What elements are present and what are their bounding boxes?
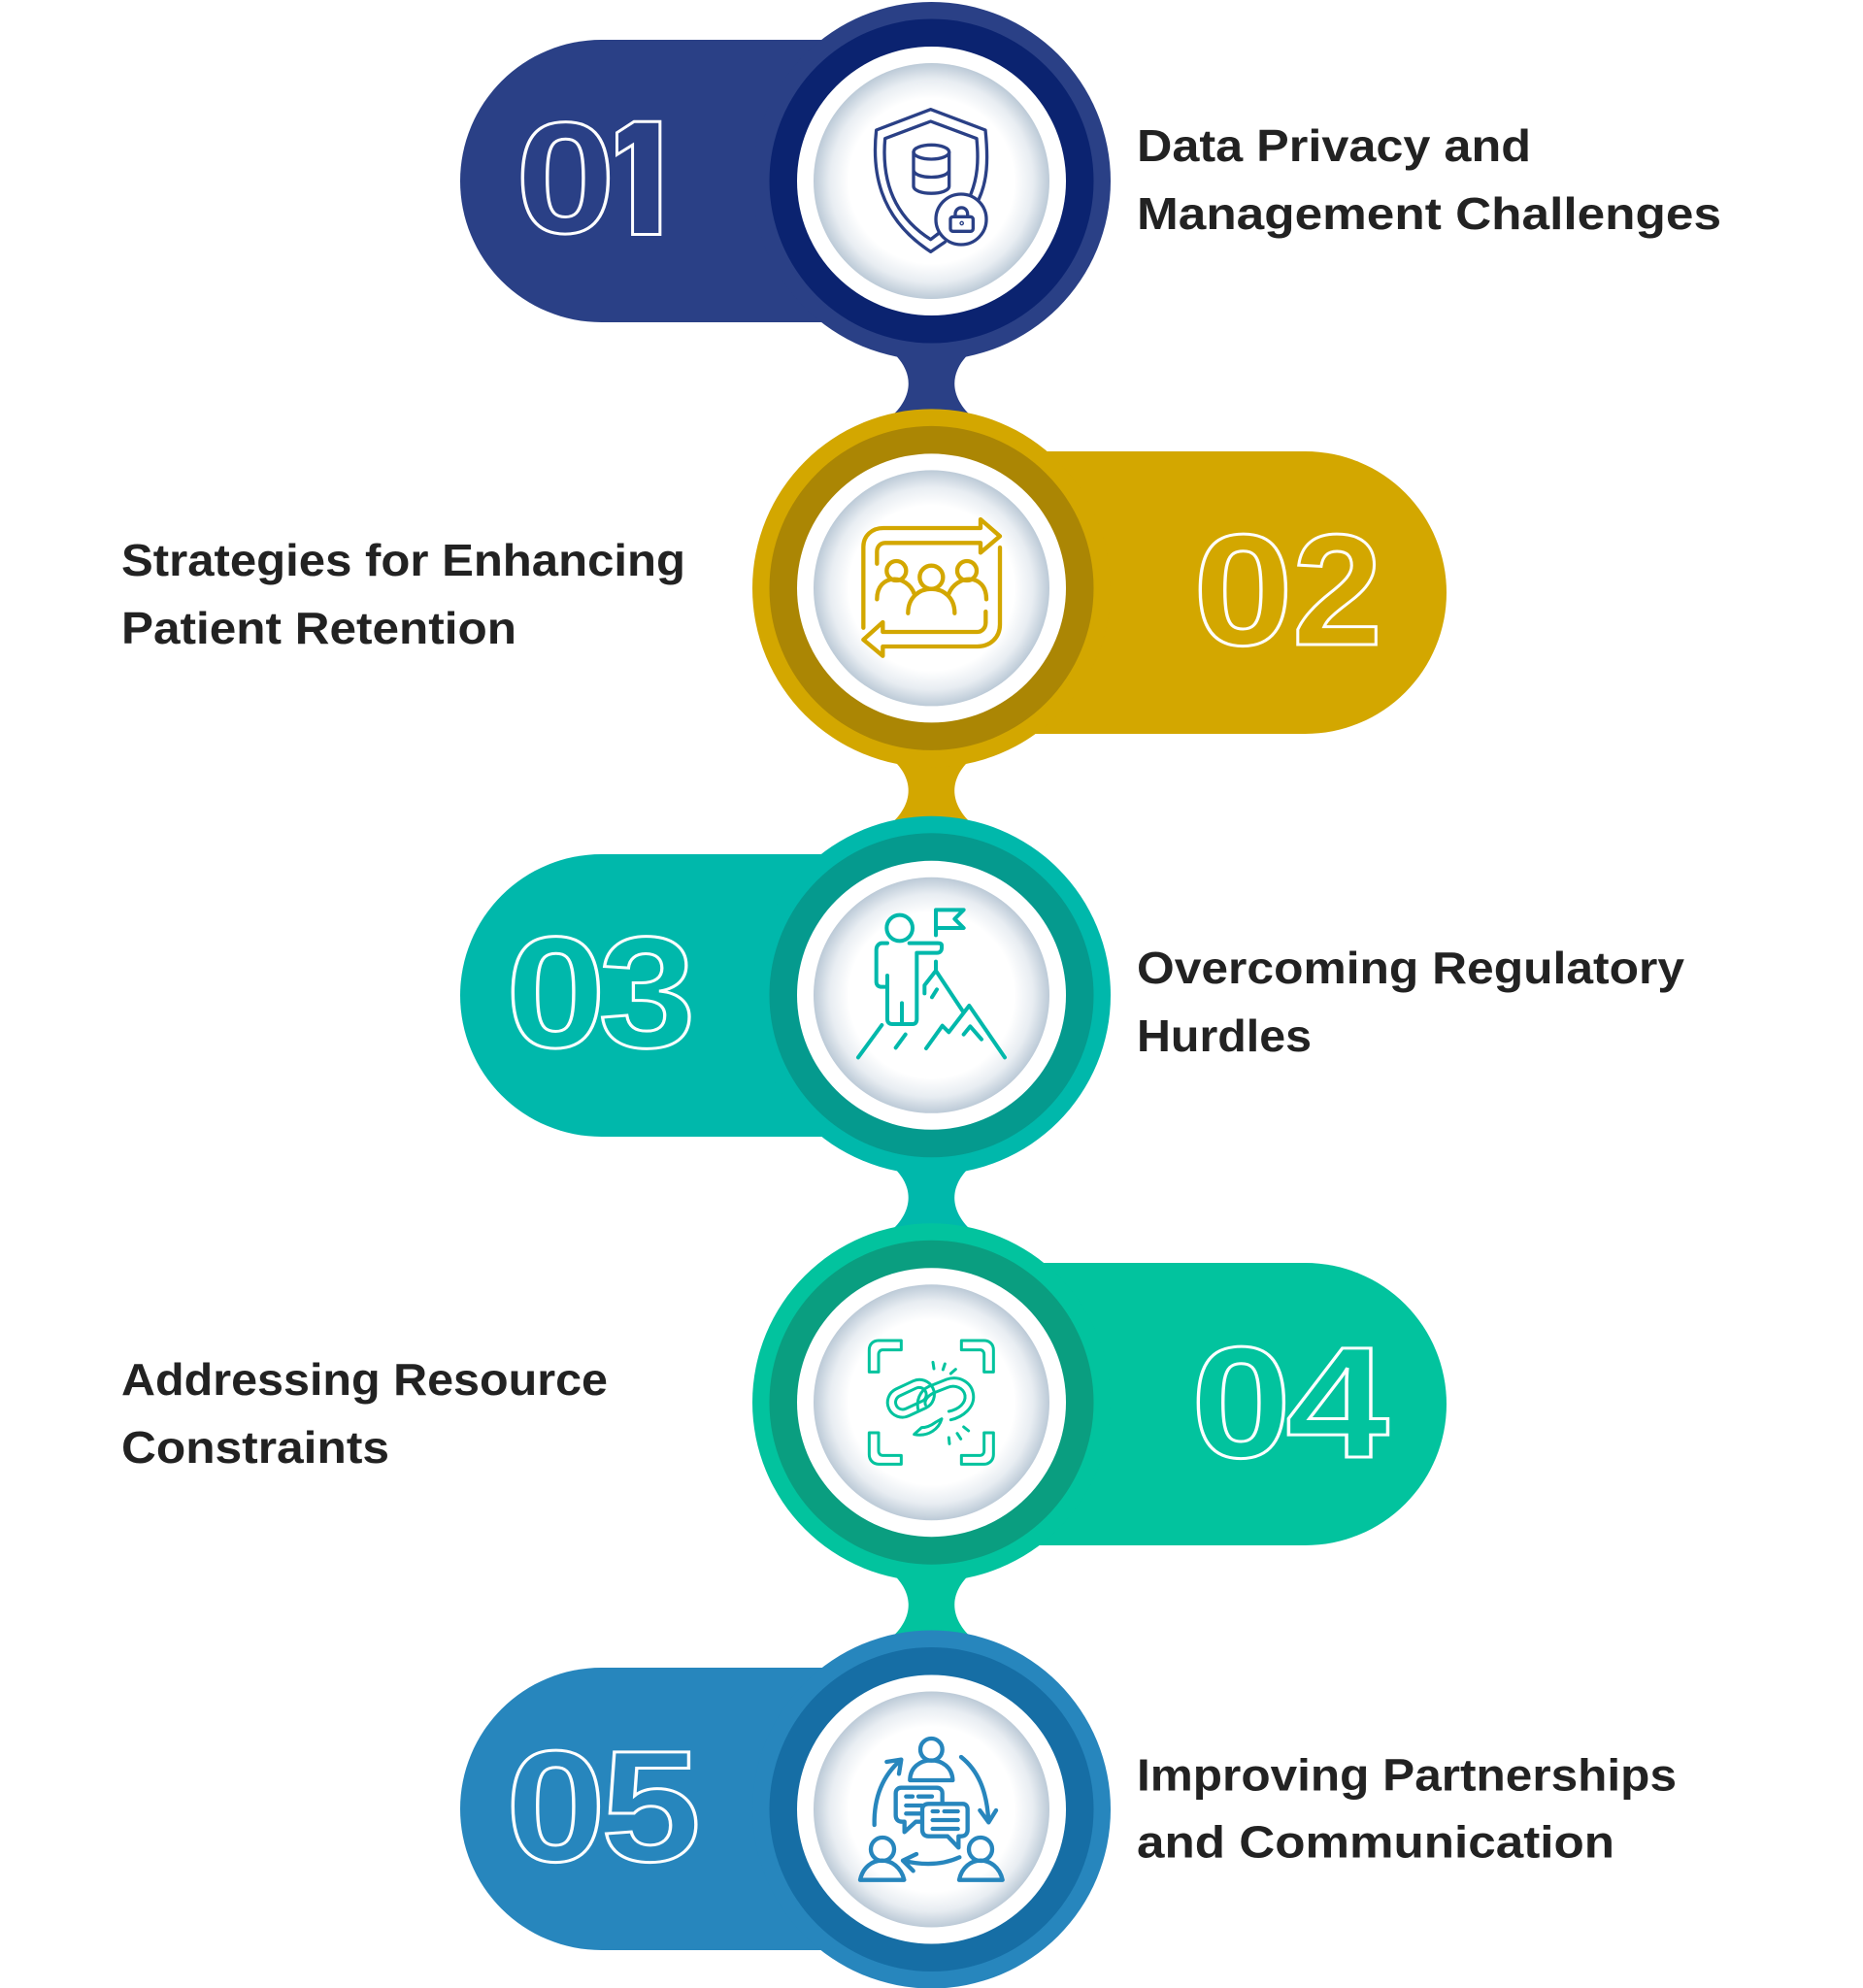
number 05: 0 xyxy=(506,1717,606,1895)
step 3: regulatory hurdles xyxy=(460,816,1684,1233)
pill 05 xyxy=(460,1668,1068,1950)
label 1: Data Privacy and xyxy=(1137,120,1531,171)
number 03: 3 xyxy=(598,903,695,1081)
label 4 xyxy=(121,1354,608,1473)
ring 2 xyxy=(752,409,1111,767)
step 1: data privacy xyxy=(460,2,1721,419)
number 02: 0 xyxy=(1193,501,1293,679)
icon: shield with database and lock xyxy=(875,110,987,251)
label 1 xyxy=(1137,120,1721,239)
ring 3 xyxy=(752,816,1111,1175)
connector 2 xyxy=(889,756,975,826)
ring 5 xyxy=(752,1631,1111,1988)
label 3 xyxy=(1137,943,1684,1061)
label 5: Improving Partnerships xyxy=(1137,1749,1677,1800)
label 3: Overcoming Regulatory xyxy=(1137,943,1684,993)
ring 4 xyxy=(752,1223,1111,1581)
step 2: patient retention xyxy=(121,409,1447,826)
number 03 xyxy=(506,903,695,1081)
number 04 xyxy=(1191,1313,1388,1491)
number 03: 0 xyxy=(506,903,606,1081)
icon: people communicating in a cycle xyxy=(860,1739,1003,1880)
pill 01 xyxy=(460,40,1068,322)
number 02: 2 xyxy=(1292,501,1382,679)
pill 04 xyxy=(796,1263,1447,1545)
label 2: Patient Retention xyxy=(121,603,516,653)
label 5 xyxy=(1137,1749,1677,1868)
number 01 xyxy=(520,120,662,236)
pill 02 xyxy=(796,451,1447,734)
connector 4 xyxy=(889,1571,975,1640)
number 04: 4 xyxy=(1285,1313,1388,1491)
label 3: Hurdles xyxy=(1137,1011,1312,1061)
number 01: 1 xyxy=(586,79,697,302)
number 05 xyxy=(506,1717,701,1895)
step 5: partnerships and communication xyxy=(460,1631,1677,1988)
step 4: resource constraints xyxy=(121,1223,1447,1640)
label 4: Constraints xyxy=(121,1422,389,1473)
label 2 xyxy=(121,535,685,653)
label 2: Strategies for Enhancing xyxy=(121,535,685,585)
label 1: Management Challenges xyxy=(1137,188,1721,239)
number 05: 5 xyxy=(601,1717,701,1895)
icon: broken chain link xyxy=(869,1341,993,1464)
connector 1 xyxy=(889,349,975,419)
ring 1 xyxy=(752,2,1111,360)
label 4: Addressing Resource xyxy=(121,1354,608,1405)
number 04: 0 xyxy=(1191,1313,1291,1491)
connector 3 xyxy=(889,1163,975,1233)
icon: people in a cycle xyxy=(863,519,1000,656)
number 01: 0 xyxy=(516,89,615,266)
number 02 xyxy=(1193,501,1382,679)
label 5: and Communication xyxy=(1137,1817,1614,1868)
icon: person with flag on mountain xyxy=(858,910,1005,1057)
pill 03 xyxy=(460,854,1068,1137)
